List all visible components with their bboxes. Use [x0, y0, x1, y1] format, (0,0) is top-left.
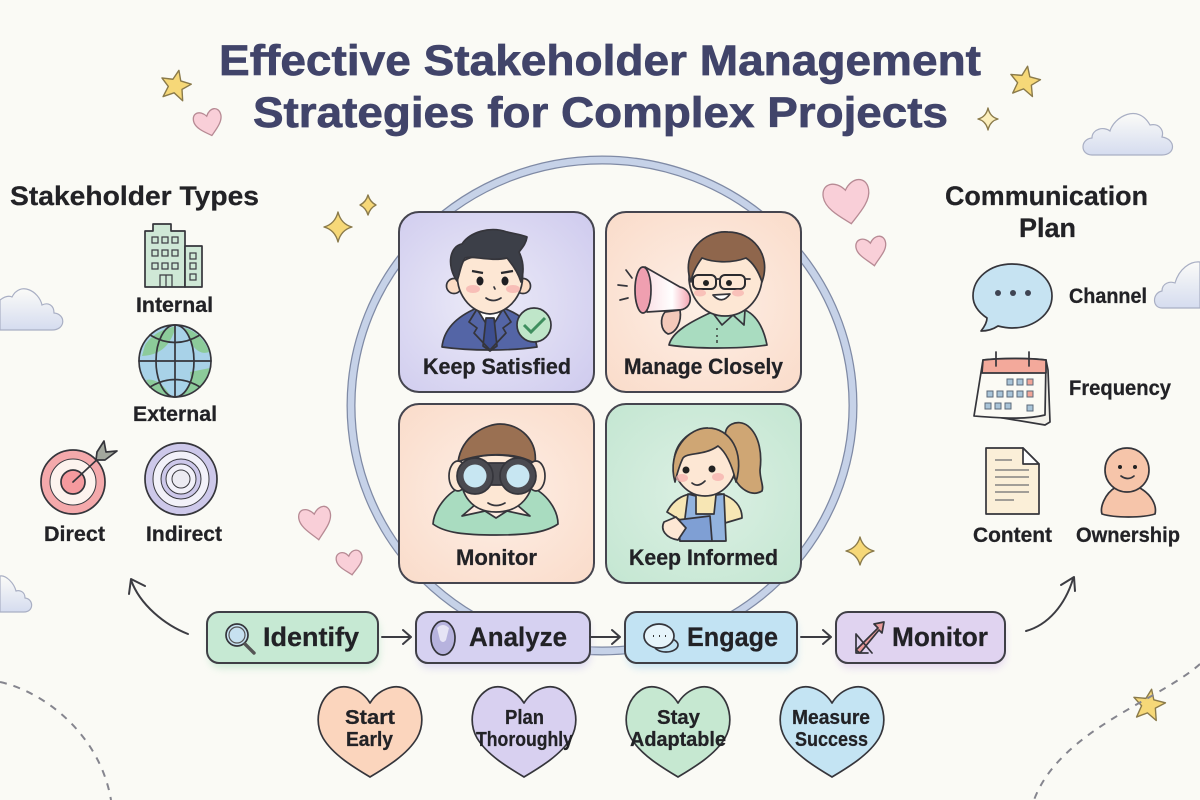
icon: document: [986, 448, 1039, 514]
process flow: [207, 612, 1005, 668]
step: monitor: Monitor: [892, 622, 988, 652]
heart: stay adaptable: [626, 687, 730, 777]
icon: dartboard: [41, 441, 117, 514]
label: Content: [973, 524, 1052, 547]
icon: building: [145, 224, 202, 287]
icon: person with megaphone: [618, 232, 767, 348]
arrow: [801, 630, 831, 644]
label: Frequency: [1069, 377, 1171, 400]
heart: stay adaptable: Stay: [657, 707, 701, 729]
heart: start early: Early: [346, 729, 394, 751]
heart: plan thoroughly: Plan: [505, 707, 544, 729]
arrow: [382, 630, 411, 644]
decorative stars: [158, 64, 1167, 722]
heart: stay adaptable: Adaptable: [630, 729, 726, 751]
arrow: [590, 630, 620, 644]
icon: businessman: [442, 230, 551, 351]
heart: measure success: [780, 687, 884, 777]
icon: speech bubble: [973, 264, 1052, 331]
heading: Stakeholder Types: [10, 181, 259, 211]
icon: magnifier: [226, 624, 254, 653]
panel: keep informed: [606, 404, 801, 583]
title: Effective Stakeholder Management: [219, 37, 981, 85]
title: Strategies for Complex Projects: [253, 89, 948, 137]
panel: communication plan: [945, 181, 1180, 547]
icon: analysis badge: [431, 621, 455, 655]
step: identify: Identify: [263, 622, 359, 652]
panel: stakeholder types: [10, 181, 259, 546]
heart: start early: Start: [345, 707, 395, 729]
icon: chat bubbles: [644, 624, 678, 652]
label: External: [133, 403, 217, 426]
step: analyze: Analyze: [469, 622, 567, 652]
arrow: to stakeholder types: [129, 579, 188, 634]
step: monitor: [836, 612, 1005, 668]
dashed corner curves: [0, 664, 1200, 800]
step: identify: [207, 612, 379, 668]
icon: person: [1102, 448, 1155, 517]
title: [219, 37, 981, 137]
panel: keep satisfied: [399, 212, 594, 392]
icon: arrow trend: [856, 622, 884, 653]
heading: Communication: [945, 181, 1148, 211]
icon: globe: [139, 325, 211, 397]
label: Channel: [1069, 285, 1147, 308]
tips hearts: [318, 687, 884, 777]
icon: calendar: [974, 352, 1050, 425]
heart: measure success: Measure: [792, 707, 870, 729]
label: Indirect: [146, 523, 222, 546]
arrow: to communication plan: [1026, 577, 1075, 631]
label: Ownership: [1076, 524, 1180, 547]
label: Keep Satisfied: [423, 354, 571, 379]
label: Internal: [136, 294, 213, 317]
heading line 2: Plan: [1019, 213, 1076, 243]
step: engage: [625, 612, 797, 668]
label: Direct: [44, 523, 105, 546]
step: engage: Engage: [687, 622, 778, 652]
icon: girl with books: [663, 423, 763, 541]
heart: plan thoroughly: [472, 687, 576, 777]
label: Manage Closely: [624, 354, 784, 379]
label: Keep Informed: [629, 545, 778, 570]
panel: manage closely: [606, 212, 801, 392]
step: analyze: [416, 612, 590, 668]
label: Monitor: [456, 545, 537, 570]
heart: plan thoroughly: Thoroughly: [476, 729, 574, 751]
icon: concentric circles: [145, 443, 217, 515]
heart: start early: [318, 687, 422, 777]
clouds: [0, 114, 1200, 612]
central circle ring: [351, 160, 853, 651]
icon: person with binoculars: [433, 424, 558, 535]
decorative hearts: [192, 107, 889, 577]
heart: measure success: Success: [795, 729, 868, 751]
panel: monitor: [399, 404, 594, 583]
